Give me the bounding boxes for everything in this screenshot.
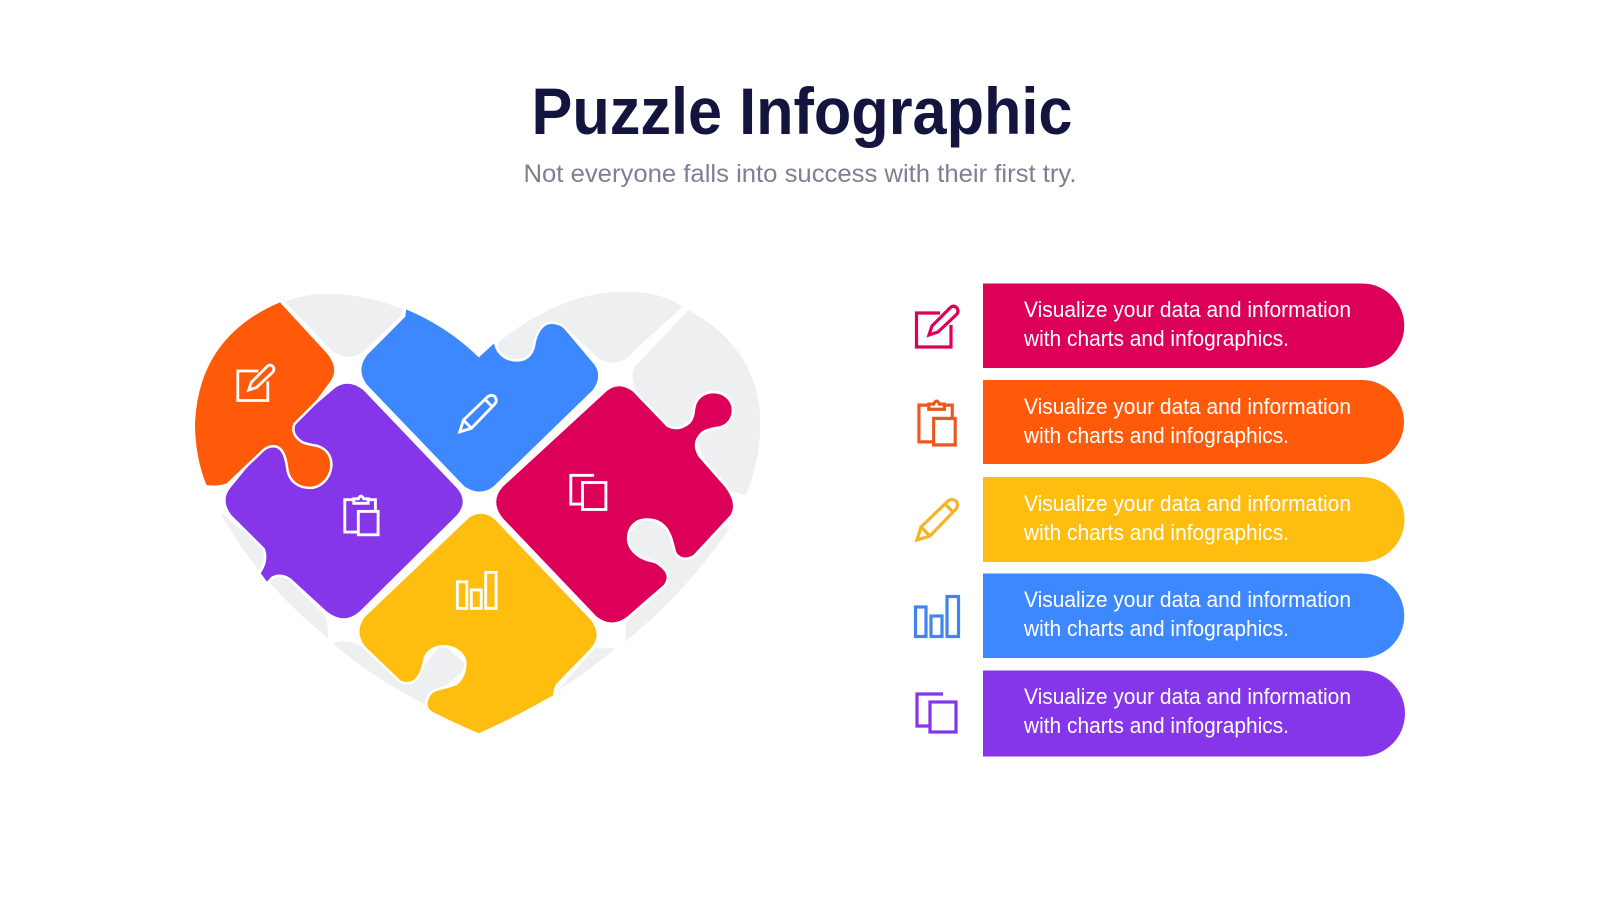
pill: yellow (983, 477, 1404, 562)
gray piece: bottom left (333, 641, 468, 706)
title: Puzzle Infographic (532, 74, 1072, 148)
icon: white copy (571, 475, 606, 510)
puzzle piece: purple (226, 384, 463, 618)
icon: clipboard (919, 401, 955, 445)
puzzle piece: blue (361, 309, 598, 492)
row 2: orange (919, 380, 1404, 464)
text block: Visualize your data and information (1024, 491, 1351, 516)
row 1: pink (916, 284, 1404, 368)
pill: orange (983, 380, 1404, 464)
icon: pencil (917, 500, 958, 540)
gray piece: bottom right (556, 648, 616, 692)
text block: Visualize your data and information (1024, 684, 1351, 709)
gray piece: lower right (623, 517, 730, 642)
puzzle piece: orange (195, 302, 334, 487)
pill: blue (983, 574, 1404, 658)
icon: white edit (238, 365, 274, 401)
subtitle: Not everyone falls into success with their first try. (524, 160, 1076, 188)
gray piece: top right (497, 292, 683, 367)
text block: with charts and infographics. (1023, 520, 1289, 545)
text block: Visualize your data and information (1024, 587, 1351, 612)
icon: bars (916, 596, 958, 636)
gray piece: top left (285, 294, 402, 357)
text block: with charts and infographics. (1023, 326, 1289, 351)
gray piece: lower left (220, 512, 328, 638)
text block: Visualize your data and information (1024, 394, 1351, 419)
gray piece: right (632, 310, 760, 495)
text block: with charts and infographics. (1023, 423, 1289, 448)
text block: with charts and infographics. (1023, 713, 1289, 738)
icon: edit (916, 306, 958, 347)
row 4: blue (916, 574, 1404, 658)
puzzle piece: pink (496, 386, 733, 622)
text block: with charts and infographics. (1023, 616, 1289, 641)
pill: purple (983, 670, 1405, 756)
text block: Visualize your data and information (1024, 297, 1351, 322)
icon: white pencil (460, 395, 496, 432)
puzzle piece: yellow (359, 514, 597, 733)
pill: pink (983, 284, 1404, 368)
row 3: yellow (917, 477, 1404, 562)
heart puzzle chart (195, 292, 760, 733)
icon: white bars (457, 572, 496, 608)
icon: white clipboard (345, 496, 378, 535)
row 5: purple (917, 670, 1405, 756)
icon: copy (917, 694, 956, 732)
